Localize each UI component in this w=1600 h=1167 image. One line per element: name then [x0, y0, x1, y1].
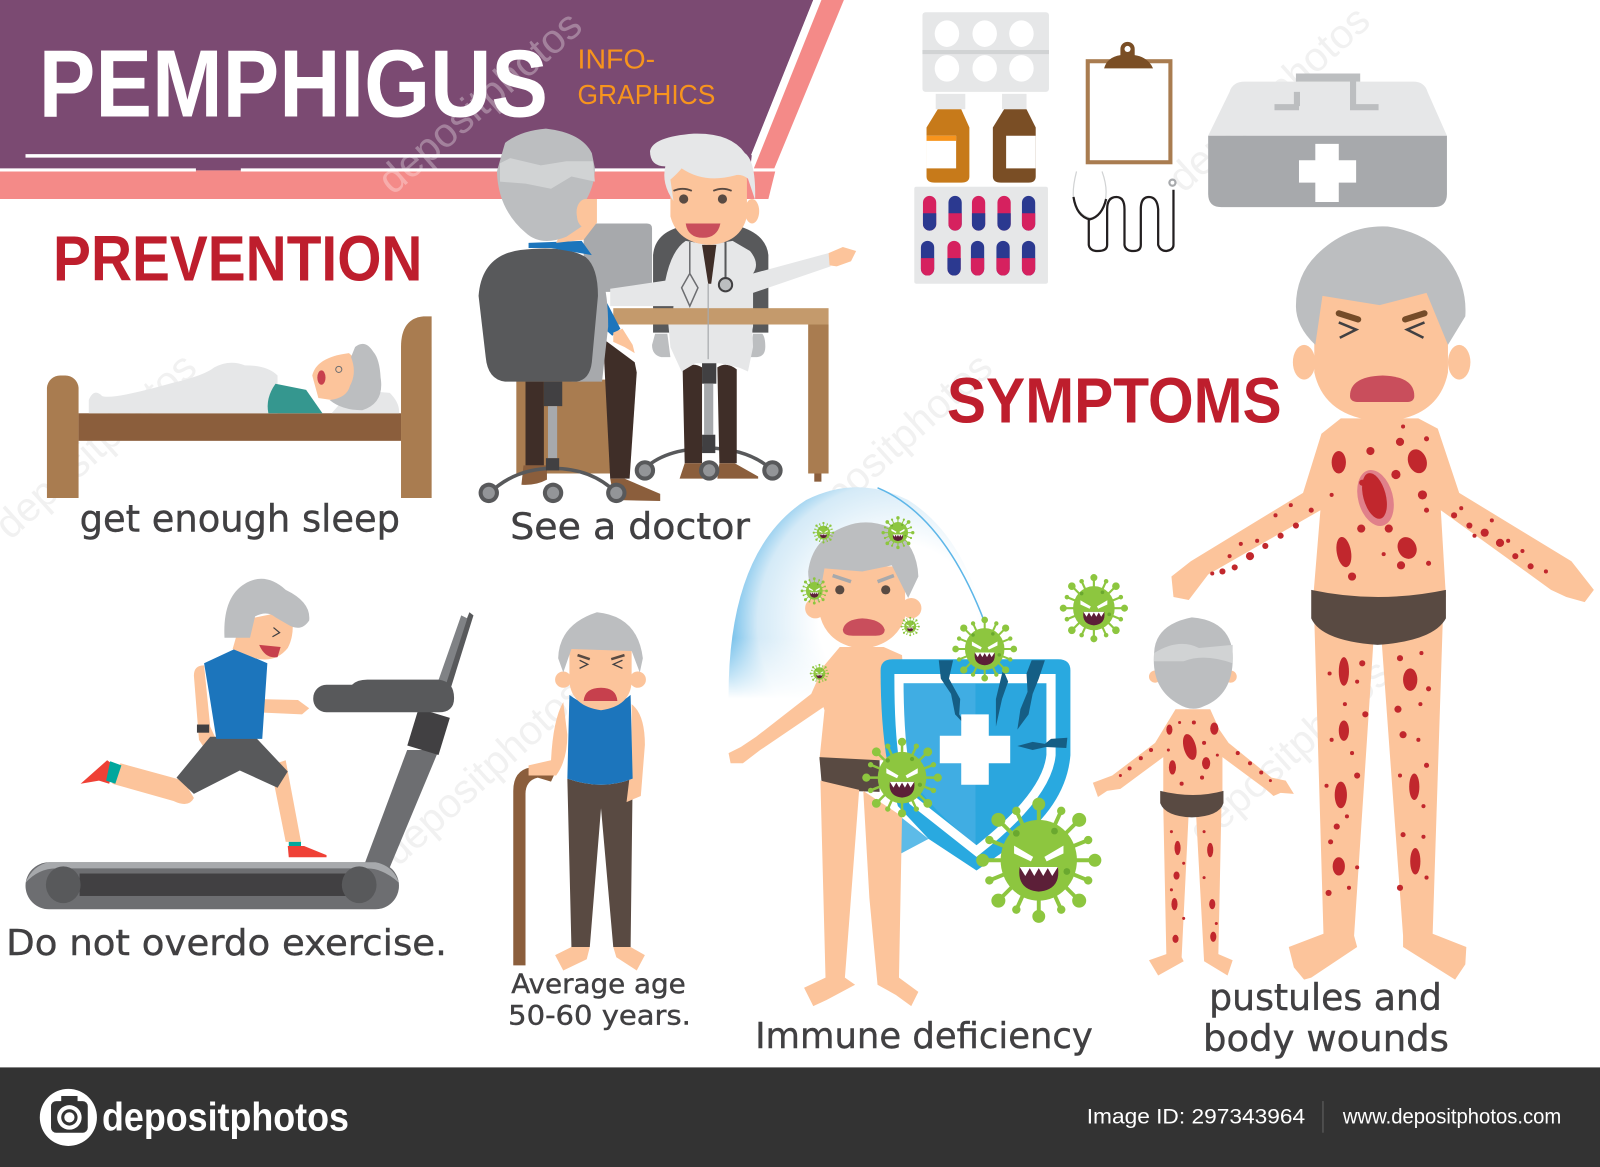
- banner: pink stripe and base: [0, 170, 776, 199]
- pustules: [1210, 425, 1548, 896]
- caption: average age: Average age: [511, 969, 686, 1000]
- footer bar: [0, 1067, 1600, 1167]
- caption: pustules and body wounds: pustules and: [1209, 976, 1442, 1019]
- watermark: depositphotos repeats: [0, 0, 1399, 874]
- runner arms and legs: [194, 665, 216, 757]
- banner: purple panel: [0, 0, 813, 170]
- subtitle: GRAPHICS: [578, 79, 715, 110]
- desk top and leg: [613, 308, 829, 325]
- icon: orange bottle: [927, 94, 969, 183]
- head: [555, 671, 571, 688]
- patient head: [529, 241, 592, 255]
- caption: average age: [508, 969, 691, 1032]
- watermark: depositphotos repeats: depositphotos: [781, 343, 1001, 548]
- watermark: depositphotos repeats: depositphotos: [1159, 0, 1378, 201]
- heading: prevention: PREVENTION: [53, 223, 422, 295]
- caption: immune deficiency: Immune deficiency: [755, 1016, 1093, 1057]
- subtitle: [578, 43, 715, 110]
- shield cracks: [939, 660, 969, 730]
- head: [1293, 345, 1315, 380]
- pustules: [1119, 720, 1272, 943]
- illustration: man sleeping in bed: [47, 316, 432, 498]
- monitor: [584, 223, 652, 292]
- doctor head: [745, 199, 759, 223]
- patient chair: [571, 276, 608, 382]
- briefs: [819, 757, 880, 792]
- runner shirt: [204, 649, 267, 739]
- footer brand: depositphotos: [102, 1096, 349, 1140]
- caption: pustules and body wounds: body wounds: [1203, 1017, 1449, 1060]
- head: [805, 598, 826, 618]
- illustration: old man with cane: [513, 612, 646, 970]
- icon: camera logo: [40, 1089, 97, 1146]
- caption: average age: 50-60 years.: [508, 1001, 691, 1032]
- illustration: immune deficiency man with shield: [719, 487, 1127, 1006]
- stethoscope: [682, 242, 732, 306]
- treadmill frame: [437, 612, 473, 694]
- shield: [881, 659, 1070, 870]
- left leg and foot: [804, 781, 859, 1006]
- caption: get enough sleep: get enough sleep: [80, 497, 400, 541]
- arms: [529, 702, 567, 776]
- icons: medicine: [914, 12, 1447, 284]
- header banner: depositphotos: [369, 1, 590, 203]
- viruses: [813, 522, 834, 543]
- illustration: man with pustules, back view: [1093, 617, 1294, 976]
- heading: symptoms: SYMPTOMS: [947, 364, 1282, 436]
- doctor coat: [610, 241, 831, 371]
- doctor coat lower: [668, 325, 753, 371]
- title: PEMPHIGUS: [39, 30, 548, 137]
- patient legs: [603, 339, 637, 479]
- illustration: man on treadmill: [26, 579, 473, 909]
- icon: capsule pack: [914, 187, 1048, 284]
- shield cross: [940, 714, 1010, 785]
- illustration: doctor consultation: [479, 129, 856, 503]
- runner shorts: [177, 737, 288, 794]
- icon: clipboard: [1088, 42, 1170, 162]
- subtitle: INFO-: [578, 43, 655, 74]
- caption: do not overdo exercise: Do not overdo exercise.: [6, 923, 447, 964]
- icon: stethoscope: [1073, 171, 1176, 251]
- body: torso and arm: [729, 647, 908, 763]
- shirt: [567, 695, 633, 785]
- watermark: depositphotos repeats: depositphotos: [373, 670, 593, 874]
- legs: [567, 779, 633, 947]
- body: [1171, 418, 1594, 980]
- doctor legs and stand: [643, 448, 772, 470]
- illustration: man with pustules, front view: [1171, 226, 1594, 980]
- desk back panel: [516, 380, 613, 473]
- icon: first aid kit: [1208, 73, 1447, 207]
- protective bubble: [729, 487, 985, 704]
- doctor chair: [653, 227, 768, 333]
- icon: brown bottle: [993, 94, 1036, 183]
- caption: pustules and body wounds: [1203, 976, 1449, 1060]
- header banner: [0, 0, 844, 203]
- runner head: [233, 610, 293, 659]
- right leg and foot: [863, 791, 918, 1006]
- watermark: depositphotos repeats: depositphotos: [1179, 649, 1399, 854]
- footer site url: www.depositphotos.com: [1342, 1105, 1561, 1129]
- cane: [513, 767, 556, 965]
- footer image id: Image ID: 297343964: [1087, 1105, 1305, 1129]
- caption: see a doctor: See a doctor: [510, 505, 751, 548]
- icon: tablet blister: [922, 12, 1049, 92]
